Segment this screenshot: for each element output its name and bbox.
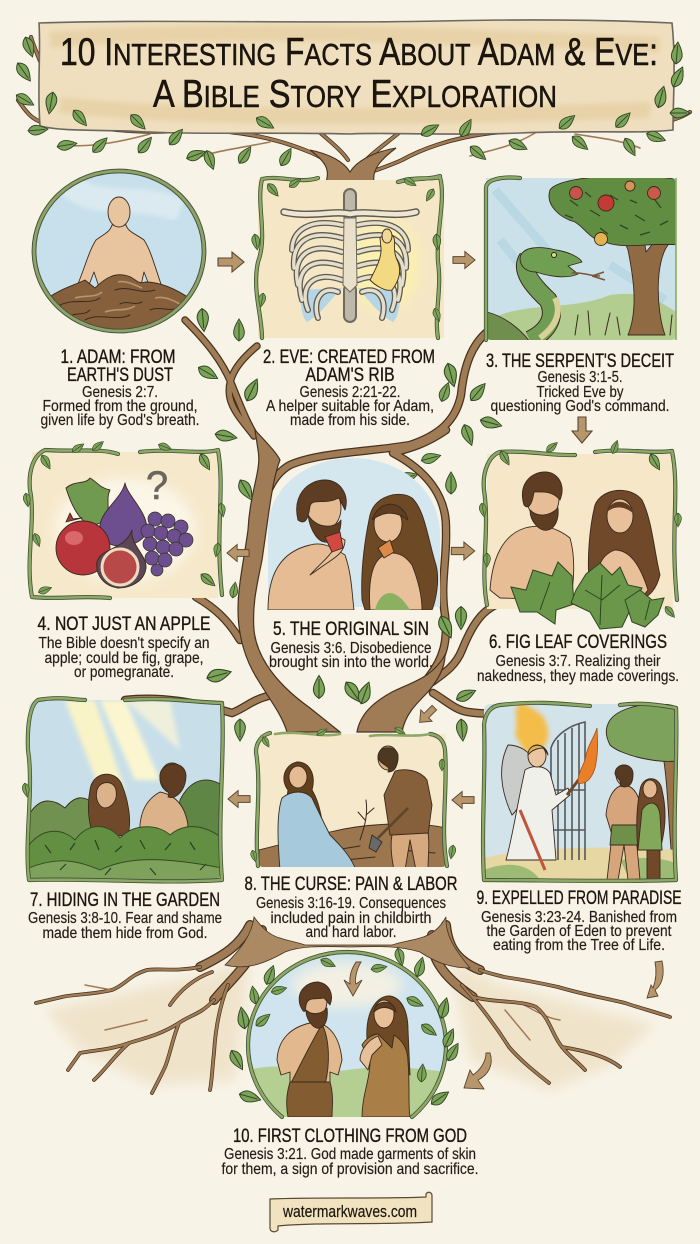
heading and text 5: 5. THE ORIGINAL SIN — [273, 618, 429, 640]
root wash shadows — [45, 960, 655, 1090]
heading and text 2: ADAM'S RIB — [306, 364, 394, 386]
heading and text 4: 4. NOT JUST AN APPLE — [38, 613, 210, 635]
heading and text 2: Genesis 2:21-22. — [300, 384, 400, 401]
heading and text 3: questioning God's command. — [490, 398, 670, 415]
heading and text 8 — [244, 873, 458, 941]
panel 3: the serpent's deceit — [486, 176, 680, 345]
heading and text 3: Tricked Eve by — [536, 384, 624, 401]
figure: Adam in skins — [277, 982, 342, 1117]
icon: glowing Eve — [370, 229, 400, 290]
footer scroll — [270, 1192, 432, 1232]
figure: Adam hiding — [139, 762, 188, 834]
heading and text 1: given life by God's breath. — [40, 412, 200, 429]
icon: ground — [485, 848, 673, 879]
vine frame — [483, 703, 676, 881]
figure: man with shovel — [369, 746, 432, 870]
heading and text 8: Genesis 3:16-19. Consequences — [256, 895, 446, 912]
tree leaves — [13, 35, 690, 754]
icon: gate — [551, 722, 585, 860]
heading and text 9: the Garden of Eden to prevent — [486, 923, 672, 940]
figure: Eve — [588, 490, 660, 600]
arrow: 5 to 4 — [227, 544, 249, 562]
panel 10: first clothing from God — [227, 947, 462, 1120]
vine frame — [478, 439, 681, 620]
arrow: 8 to 7 — [228, 790, 250, 808]
icon: apple tree — [549, 176, 680, 335]
footer scroll: watermarkwaves.com — [282, 1202, 417, 1221]
panel 6: fig leaf coverings — [478, 439, 681, 629]
light rays — [65, 700, 180, 790]
icon: earth mound — [51, 274, 186, 329]
heading and text 2 — [263, 346, 435, 429]
figure: Eve leaving — [637, 779, 665, 880]
icon: meadow — [253, 1066, 440, 1117]
figure: Eve hiding — [88, 774, 130, 838]
heading and text 8: and hard labor. — [306, 924, 396, 941]
icon: fig leaves — [511, 562, 664, 629]
icon: purple fig — [100, 483, 147, 546]
title text: 10 INTERESTING FACTS ABOUT ADAM & EVE: — [60, 31, 658, 74]
heading and text 3 — [486, 350, 674, 415]
curved arrow: into medallion 10 — [344, 962, 362, 996]
panel 8: the curse pain and labor — [250, 725, 457, 870]
heading and text 4: apple; could be fig, grape, — [44, 650, 204, 667]
icon: question mark: ? — [146, 464, 168, 508]
heading and text 2: made from his side. — [290, 412, 410, 429]
vine frame — [251, 176, 443, 338]
heading and text 1 — [40, 346, 200, 429]
figure: angel — [502, 745, 570, 870]
icon: tree — [664, 762, 674, 850]
figure: Adam — [490, 472, 574, 600]
heading and text 4 — [38, 613, 210, 681]
heading and text 6: Genesis 3:7. Realizing their — [496, 653, 661, 670]
vine frame — [21, 698, 223, 881]
vine frame — [486, 177, 676, 340]
arrow: 2 to 3 — [453, 252, 475, 268]
heading and text 10: for them, a sign of provision and sacrifice. — [222, 1161, 478, 1178]
heading and text 1: Genesis 2:7. — [82, 384, 158, 401]
heading and text 7: Genesis 3:8-10. Fear and shame — [28, 910, 222, 927]
icon: soil — [259, 824, 446, 870]
heading and text 9: eating from the Tree of Life. — [493, 937, 665, 954]
icon: fig leaf — [66, 478, 110, 526]
icon: flaming sword — [567, 728, 598, 795]
heading and text 4: The Bible doesn't specify an — [38, 635, 210, 652]
figure: Adam leaving — [606, 765, 642, 880]
heading and text 5: brought sin into the world. — [269, 654, 433, 671]
curved arrow: 9 to 10 top right — [647, 961, 663, 998]
panel 4: not just an apple — [22, 439, 227, 598]
heading and text 4: or pomegranate. — [74, 664, 174, 681]
heading and text 5: Genesis 3:6. Disobedience — [270, 640, 432, 657]
heading and text 1: EARTH'S DUST — [67, 364, 173, 386]
icon: front bushes — [29, 827, 222, 885]
heading and text 10 — [222, 1125, 478, 1178]
figure: Adam eating — [268, 480, 354, 610]
heading and text 1: 1. ADAM: FROM — [60, 346, 176, 368]
figure: Eve in skins — [360, 996, 410, 1117]
icon: ribcage — [284, 195, 416, 322]
heading and text 10: Genesis 3:21. God made garments of skin — [224, 1146, 476, 1163]
panel 7: hiding in the garden — [21, 698, 223, 885]
heading and text 9 — [476, 887, 682, 954]
figure: woman in blue — [278, 762, 356, 870]
heading and text 8: 8. THE CURSE: PAIN & LABOR — [244, 873, 458, 895]
icon: cut fig — [97, 530, 146, 588]
heading and text 3: Genesis 3:1-5. — [538, 369, 622, 386]
vine frame — [250, 725, 457, 866]
heading and text 1: Formed from the ground, — [42, 398, 198, 415]
panel 9: expelled from paradise — [483, 700, 684, 885]
title text: A BIBLE STORY EXPLORATION — [153, 73, 557, 116]
heading and text 7 — [28, 889, 222, 942]
heading and text 7: 7. HIDING IN THE GARDEN — [30, 889, 220, 911]
panel 1: Adam from earth's dust — [34, 171, 204, 335]
icon: halo fire — [515, 700, 548, 753]
icon: serpent — [487, 248, 605, 342]
title text — [60, 31, 658, 116]
icon: bushes — [29, 780, 222, 880]
heading and text 6 — [477, 631, 679, 685]
wreath frame — [227, 947, 462, 1117]
arrow: 9 to 8 — [452, 792, 474, 808]
figure: Eve eating — [362, 494, 438, 610]
icon: grapes — [141, 512, 193, 576]
arrow: 3 to 6 — [572, 417, 592, 443]
heading and text 2: A helper suitable for Adam, — [266, 398, 434, 415]
arrow: 9 to 8 diagonal — [414, 702, 440, 728]
heading and text 2: 2. EVE: CREATED FROM — [263, 346, 435, 368]
arrow: 5 to 6 — [451, 542, 475, 560]
heading and text 10: 10. FIRST CLOTHING FROM GOD — [233, 1125, 467, 1147]
panel 5: the original sin — [268, 458, 440, 610]
curved arrow: root to 10 — [464, 1053, 491, 1089]
arrow: 1 to 2 — [218, 252, 244, 272]
icon: pomegranate — [56, 513, 110, 575]
heading and text 8: included pain in childbirth — [270, 910, 432, 927]
vine frame — [22, 439, 227, 598]
heading and text 5 — [269, 618, 433, 671]
heading and text 7: made them hide from God. — [42, 925, 208, 942]
icon: grass — [488, 294, 676, 340]
icon: Adam figure — [78, 196, 162, 285]
title banner — [39, 20, 674, 134]
panel 2: Eve created from Adam's rib — [251, 176, 444, 338]
